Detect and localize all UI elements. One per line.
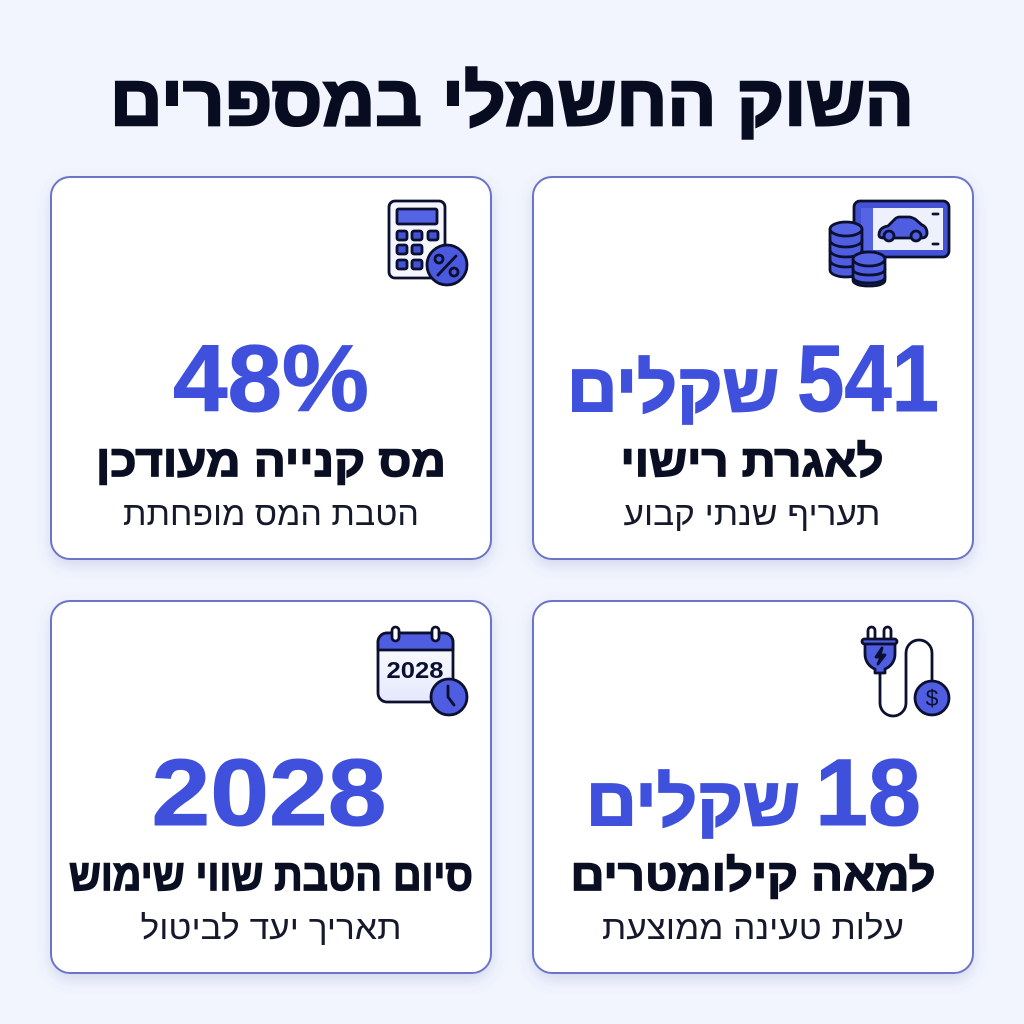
big number: 48% <box>173 326 369 432</box>
icon: calculator with percent <box>389 201 467 285</box>
big number <box>586 740 921 846</box>
big number: 541 <box>797 326 939 432</box>
icon: plug with dollar coin: $ <box>926 685 939 711</box>
heading: למאה קילומטרים <box>570 851 936 900</box>
subtext: תעריף שנתי קבוע <box>624 495 880 532</box>
icon: calendar 2028 with clock <box>378 627 467 715</box>
panel: benefit end date <box>51 601 491 973</box>
big number: 2028 <box>152 740 386 846</box>
panel: charging cost <box>533 601 973 973</box>
panel: licence fee <box>533 177 973 559</box>
heading: לאגרת רישוי <box>620 437 884 486</box>
title: השוק החשמלי במספרים <box>110 62 914 141</box>
big number: שקלים <box>567 350 779 426</box>
big number: שקלים <box>586 764 800 840</box>
icon: plug with dollar coin <box>862 627 949 716</box>
heading: מס קנייה מעודכן <box>96 437 446 486</box>
subtext: תאריך יעד לביטול <box>140 909 402 946</box>
big number <box>567 326 939 432</box>
icon: car licence and coins <box>830 201 949 286</box>
icon: calendar 2028 with clock: 2028 <box>386 657 444 683</box>
heading: סיום הטבת שווי שימוש <box>69 851 473 900</box>
subtext: עלות טעינה ממוצעת <box>602 909 904 946</box>
big number: 18 <box>815 740 921 846</box>
subtext: הטבת המס מופחתת <box>123 495 419 532</box>
panel: purchase tax <box>51 177 491 559</box>
